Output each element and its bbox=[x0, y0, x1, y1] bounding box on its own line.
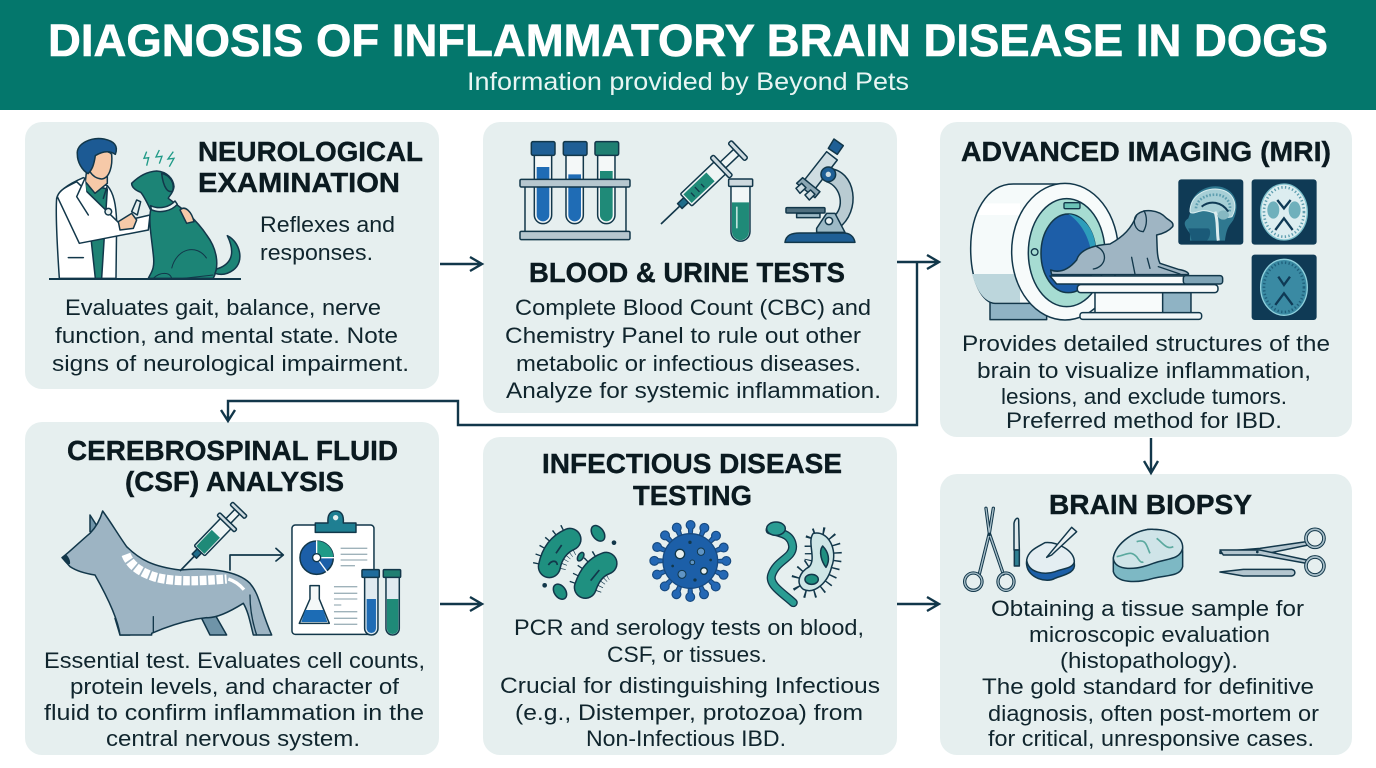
description: Evaluates gait, balance, nerve bbox=[65, 295, 381, 320]
icon: urine tube bbox=[729, 179, 753, 241]
heading: NEUROLOGICAL bbox=[198, 136, 423, 167]
heading: TESTING bbox=[633, 480, 752, 511]
icon: dog lying bbox=[1051, 211, 1189, 275]
description: protein levels, and character of bbox=[70, 674, 400, 699]
arrow: connector to CSF analysis bbox=[221, 262, 917, 425]
icon: axial brain scan dark bbox=[1252, 255, 1317, 320]
icon: syringe bbox=[651, 139, 749, 234]
description bbox=[52, 295, 409, 376]
icons: surgical tools and tissue bbox=[965, 508, 1324, 590]
description: central nervous system. bbox=[106, 726, 360, 751]
description: sample: Obtaining a tissue sample for bbox=[991, 596, 1305, 621]
icon: bacteria bbox=[542, 523, 616, 602]
description: fluid to confirm inflammation in the bbox=[44, 700, 424, 725]
panel: blood and urine tests bbox=[483, 122, 897, 413]
icon: dog spine, syringe and lab report bbox=[62, 501, 401, 635]
icon: vet examining dog bbox=[49, 139, 241, 279]
description: signs of neurological impairment. bbox=[52, 351, 409, 376]
description: brain to visualize inflammation, bbox=[977, 358, 1311, 383]
icon: brain slice bbox=[1113, 529, 1183, 581]
icon: dog with spine bbox=[62, 511, 272, 635]
panel: brain biopsy bbox=[940, 474, 1352, 755]
icon: forceps bbox=[965, 508, 1014, 590]
description: metabolic or infectious diseases. bbox=[516, 351, 861, 376]
description: sample bbox=[991, 596, 1305, 673]
arrow: spine to report bbox=[230, 548, 283, 570]
icons: test tubes, syringe, microscope bbox=[520, 139, 855, 242]
title: DIAGNOSIS OF INFLAMMATORY BRAIN DISEASE IN DOGS bbox=[48, 15, 1328, 66]
description: Essential test. Evaluates cell counts, bbox=[44, 648, 425, 673]
heading: ADVANCED IMAGING (MRI) bbox=[961, 136, 1331, 167]
description bbox=[962, 331, 1330, 433]
icon: MRI scanner with dog and brain scans bbox=[971, 179, 1317, 320]
description: gold standard: diagnosis, often post-mortem or bbox=[988, 701, 1320, 726]
description: gold standard bbox=[982, 674, 1320, 751]
icon: sample tubes bbox=[362, 570, 401, 635]
description: gold standard: for critical, unresponsive cases. bbox=[988, 726, 1314, 751]
side note: Reflexes and bbox=[260, 212, 395, 237]
panel: infectious disease testing bbox=[483, 437, 897, 755]
description: importance: Non-Infectious IBD. bbox=[586, 726, 786, 751]
heading: EXAMINATION bbox=[198, 167, 400, 198]
icon: MRI scanner bbox=[971, 183, 1118, 320]
description bbox=[44, 648, 425, 751]
heading: (CSF) ANALYSIS bbox=[125, 466, 344, 497]
description: methods bbox=[514, 615, 864, 667]
icon: microscope bbox=[785, 139, 855, 242]
heading bbox=[67, 435, 398, 497]
arrow: neurological to blood tests bbox=[440, 257, 482, 271]
side note bbox=[260, 212, 395, 265]
heading bbox=[542, 448, 842, 511]
icon: axial brain scan light bbox=[1252, 179, 1317, 245]
description: Chemistry Panel to rule out other bbox=[505, 323, 862, 348]
header banner bbox=[0, 0, 1376, 110]
description: Analyze for systemic inflammation. bbox=[506, 378, 881, 403]
description: Preferred method for IBD. bbox=[1006, 408, 1282, 433]
icon: scissors bbox=[1220, 529, 1324, 575]
heading: BRAIN BIOPSY bbox=[1049, 489, 1252, 520]
heading: CEREBROSPINAL FLUID bbox=[67, 435, 398, 466]
arrow: blood tests to MRI bbox=[897, 255, 939, 269]
icon: scanner table bbox=[1050, 276, 1223, 319]
panel: cerebrospinal fluid analysis bbox=[25, 422, 439, 755]
panel: neurological examination bbox=[25, 122, 439, 389]
arrow: MRI to biopsy bbox=[1144, 438, 1158, 473]
description: sample: (histopathology). bbox=[1060, 648, 1238, 673]
arrow: infectious testing to biopsy bbox=[897, 597, 939, 611]
description: gold standard: The gold standard for definitive bbox=[982, 674, 1314, 699]
heading bbox=[198, 136, 423, 198]
description: lesions, and exclude tumors. bbox=[1001, 384, 1287, 409]
icon: parasites bbox=[767, 522, 834, 603]
icon: virus bbox=[654, 525, 726, 597]
side note: responses. bbox=[260, 240, 373, 265]
description: methods: PCR and serology tests on blood, bbox=[514, 615, 864, 640]
subtitle: Information provided by Beyond Pets bbox=[467, 68, 909, 96]
arrow: CSF to infectious testing bbox=[440, 597, 482, 611]
heading: BLOOD & URINE TESTS bbox=[529, 257, 845, 288]
description: sample: microscopic evaluation bbox=[1029, 622, 1270, 647]
icon: scalpel bbox=[1014, 518, 1019, 566]
description: function, and mental state. Note bbox=[55, 323, 398, 348]
icons: microbes bbox=[542, 522, 834, 603]
icon: probe bbox=[1220, 569, 1295, 576]
icon: tissue sample with probe bbox=[1026, 527, 1077, 580]
panel: advanced imaging MRI bbox=[940, 122, 1352, 437]
description: methods: CSF, or tissues. bbox=[607, 642, 767, 667]
description: importance: Crucial for distinguishing Infectious bbox=[500, 673, 880, 698]
description: Provides detailed structures of the bbox=[962, 331, 1330, 356]
icon: test tube rack bbox=[520, 142, 630, 240]
icon: clipboard report bbox=[292, 511, 374, 634]
description: importance bbox=[500, 673, 880, 751]
icon: sagittal brain scan bbox=[1178, 179, 1243, 245]
heading: INFECTIOUS DISEASE bbox=[542, 448, 842, 479]
description: importance: (e.g., Distemper, protozoa) from bbox=[515, 700, 863, 725]
description: Complete Blood Count (CBC) and bbox=[515, 295, 871, 320]
description bbox=[505, 295, 881, 403]
icon: syringe bbox=[171, 501, 249, 579]
